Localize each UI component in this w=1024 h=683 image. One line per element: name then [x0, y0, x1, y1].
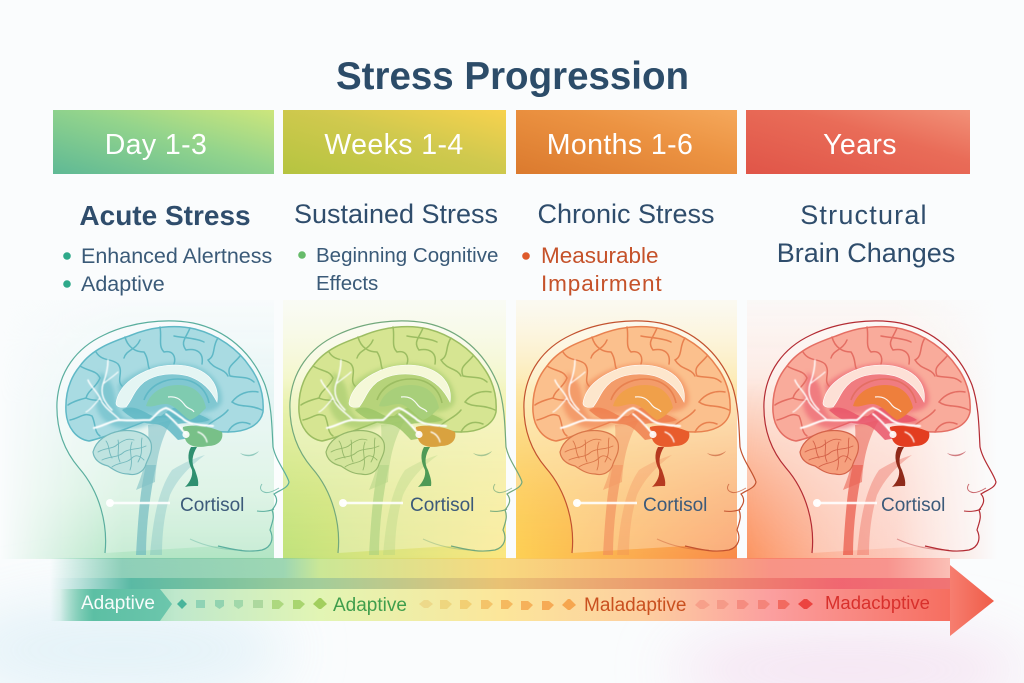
panel: chronic stress text: Chronic Stress: [537, 199, 715, 229]
panel: months 1-6 background: [516, 300, 737, 559]
panel: years background: [747, 300, 997, 559]
panel: day 1-3 header: [53, 110, 274, 174]
panel: sustained stress text: [294, 199, 498, 295]
label: madacbptive: Madacbptive: [825, 592, 930, 613]
panel: acute stress text: [63, 200, 272, 296]
label: cortisol 2: Cortisol: [410, 495, 474, 516]
illustration: brain, sustained: [290, 321, 522, 555]
panel: chronic stress text: Measurable: [541, 243, 659, 268]
label: cortisol 4: Cortisol: [881, 495, 945, 516]
panel: sustained stress text: Beginning Cognitive: [316, 244, 498, 267]
panel: acute stress text: Adaptive: [81, 272, 165, 296]
illustration: brain, chronic: [524, 321, 756, 555]
label: adaptive (start): Adaptive: [81, 593, 155, 614]
panel: weeks 1-4 header: [283, 110, 506, 174]
marker: adaptive start: [60, 589, 172, 621]
panel: months 1-6 header: Months 1-6: [547, 129, 693, 161]
title: Stress Progression: [336, 55, 689, 98]
panel: years header: Years: [823, 129, 897, 161]
panel: sustained stress text: Sustained Stress: [294, 199, 498, 229]
panel: weeks 1-4 background: [283, 300, 506, 559]
background tint: [0, 600, 1024, 683]
label: cortisol 1: Cortisol: [180, 495, 244, 516]
label: adaptive (green): Adaptive: [333, 595, 407, 616]
illustration: brain, structural: [764, 321, 996, 555]
label: cortisol 3: Cortisol: [643, 495, 707, 516]
panel: structural brain changes text: Structural: [800, 200, 928, 230]
panel: chronic stress text: Impairment: [541, 271, 663, 296]
arrow: progression timeline: [50, 558, 994, 636]
panel: day 1-3 background: [14, 338, 274, 559]
panel: acute stress text: Enhanced Alertness: [81, 244, 272, 268]
panel: structural brain changes text: Brain Changes: [777, 238, 955, 268]
panel: weeks 1-4 header: Weeks 1-4: [324, 129, 464, 161]
panel: chronic stress text: [522, 199, 715, 296]
panel: day 1-3 header: Day 1-3: [105, 129, 207, 161]
panel: structural brain changes text: [777, 200, 955, 268]
panel: months 1-6 header: [516, 110, 737, 174]
panel: years header: [746, 110, 970, 174]
step markers: timeline arrows: [177, 598, 813, 610]
panel: acute stress text: Acute Stress: [79, 200, 251, 231]
panel: sustained stress text: Effects: [316, 272, 378, 295]
label: maladaptive: Maladaptive: [584, 595, 686, 616]
illustration: brain, adaptive: [57, 321, 289, 555]
